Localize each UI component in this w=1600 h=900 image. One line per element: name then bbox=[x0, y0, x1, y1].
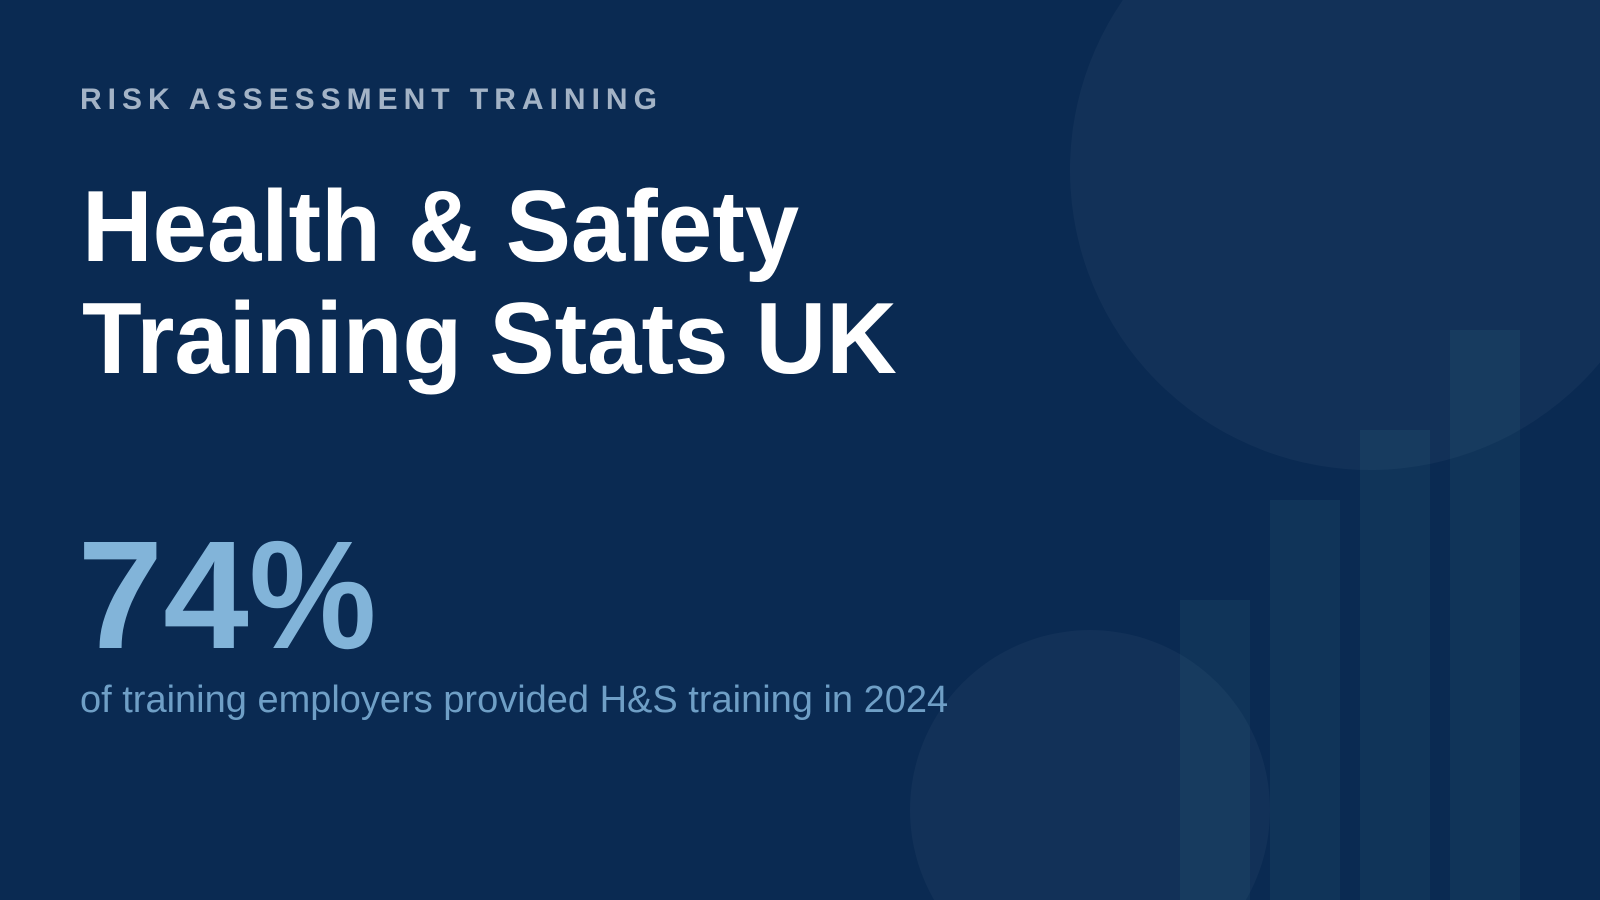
bar 3 bbox=[1360, 430, 1430, 900]
title: Health & Safety bbox=[82, 171, 799, 283]
headline statistic: 74 bbox=[78, 509, 249, 681]
bar 4 bbox=[1450, 330, 1520, 900]
bar 2 bbox=[1270, 500, 1340, 900]
bar chart motif bbox=[1180, 330, 1520, 900]
eyebrow label: RISK ASSESSMENT TRAINING bbox=[80, 83, 663, 116]
statistic description: of training employers provided H&S training in 2024 bbox=[80, 679, 948, 721]
headline statistic bbox=[78, 509, 376, 681]
bar 1 bbox=[1180, 600, 1250, 900]
decorative circle: top right bbox=[1070, 0, 1600, 470]
title bbox=[82, 171, 896, 395]
decorative circle: bottom bbox=[910, 630, 1270, 900]
headline statistic: % bbox=[249, 509, 376, 681]
title: Training Stats UK bbox=[82, 283, 896, 395]
